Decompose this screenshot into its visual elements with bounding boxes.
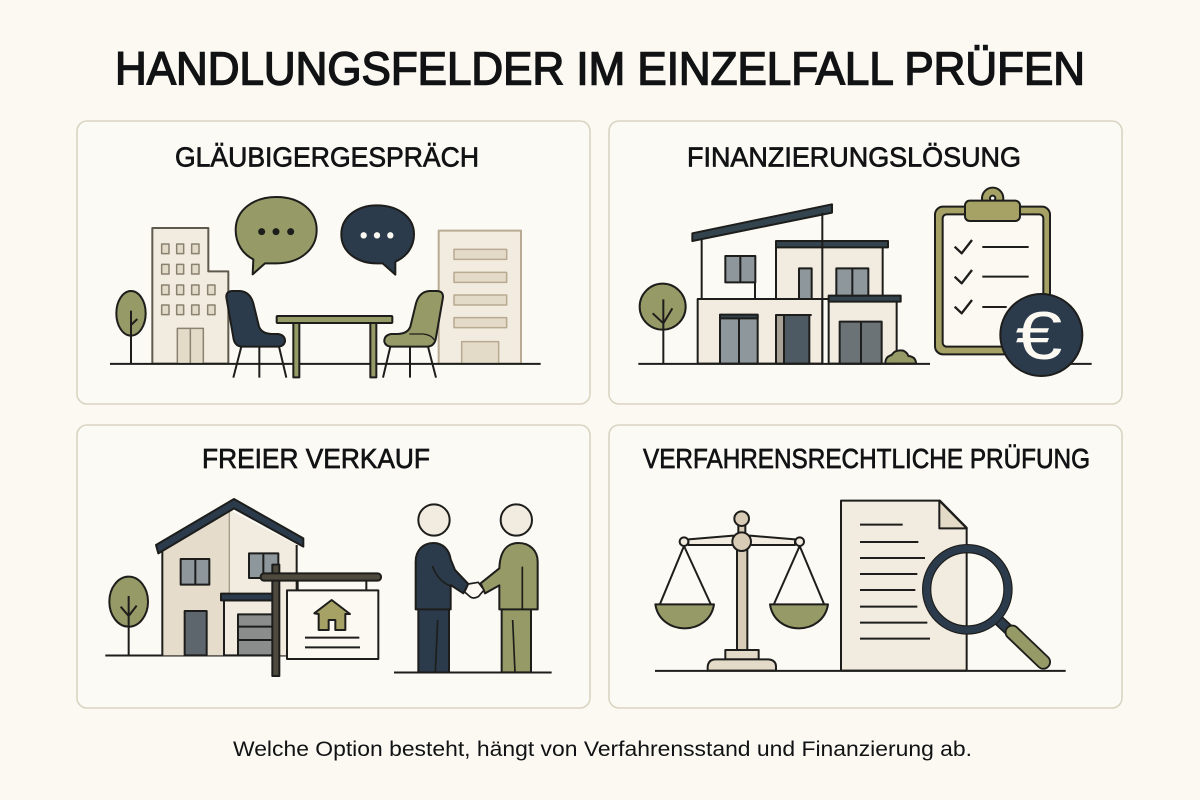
panel: Gläubigergespräch xyxy=(77,121,590,404)
heading: Gläubigergespräch: GLÄUBIGERGESPRÄCH xyxy=(175,142,479,172)
icon: document xyxy=(841,501,967,671)
icon: handshake xyxy=(465,582,484,598)
icon: tree xyxy=(109,577,148,655)
icon: euro coin xyxy=(1000,294,1082,376)
icon: olive person xyxy=(481,504,538,672)
ground line xyxy=(638,361,1092,367)
icon: tree xyxy=(116,291,146,364)
icon: navy speech bubble xyxy=(341,205,414,275)
icon: for-sale sign xyxy=(261,565,381,676)
icon: olive speech bubble xyxy=(236,197,317,274)
icon: scales of justice xyxy=(655,511,828,671)
heading: Freier Verkauf: FREIER VERKAUF xyxy=(202,443,430,474)
icon: round tree xyxy=(640,284,686,364)
illustration: meeting between buildings xyxy=(110,197,541,378)
panel: Finanzierungslösung xyxy=(609,121,1122,404)
panel: Verfahrensrechtliche Prüfung xyxy=(609,425,1122,708)
icon: navy chair xyxy=(226,291,286,378)
ground line xyxy=(105,652,287,658)
ground line: people xyxy=(394,669,552,675)
icon: magnifying glass xyxy=(927,549,1043,662)
icon: right office building xyxy=(439,231,521,364)
icon: gabled house xyxy=(156,499,303,655)
heading: Verfahrensrechtliche Prüfung: VERFAHRENSRECHTLICHE PRÜFUNG xyxy=(643,443,1090,474)
panel: Freier Verkauf xyxy=(77,425,590,708)
caption: Welche Option besteht, hängt von Verfahrensstand und Finanzierung ab. xyxy=(233,737,972,761)
icon: euro coin: € xyxy=(1016,299,1062,374)
icon: left office building xyxy=(152,228,228,364)
illustration: scales and document xyxy=(655,501,1066,671)
ground line xyxy=(655,668,1066,674)
icon: olive chair xyxy=(383,291,443,378)
icon: navy person xyxy=(416,504,468,672)
ground line xyxy=(110,361,541,367)
heading: Finanzierungslösung: FINANZIERUNGSLÖSUNG xyxy=(687,142,1021,172)
illustration: house sale and handshake xyxy=(105,499,552,676)
icon: table xyxy=(277,316,392,377)
illustration: house and financing checklist xyxy=(638,188,1092,376)
icon: modern house xyxy=(692,204,901,364)
icon: clipboard checklist xyxy=(935,188,1050,354)
title: HANDLUNGSFELDER IM EINZELFALL PRÜFEN xyxy=(115,42,1085,94)
icon: bush xyxy=(885,350,916,364)
